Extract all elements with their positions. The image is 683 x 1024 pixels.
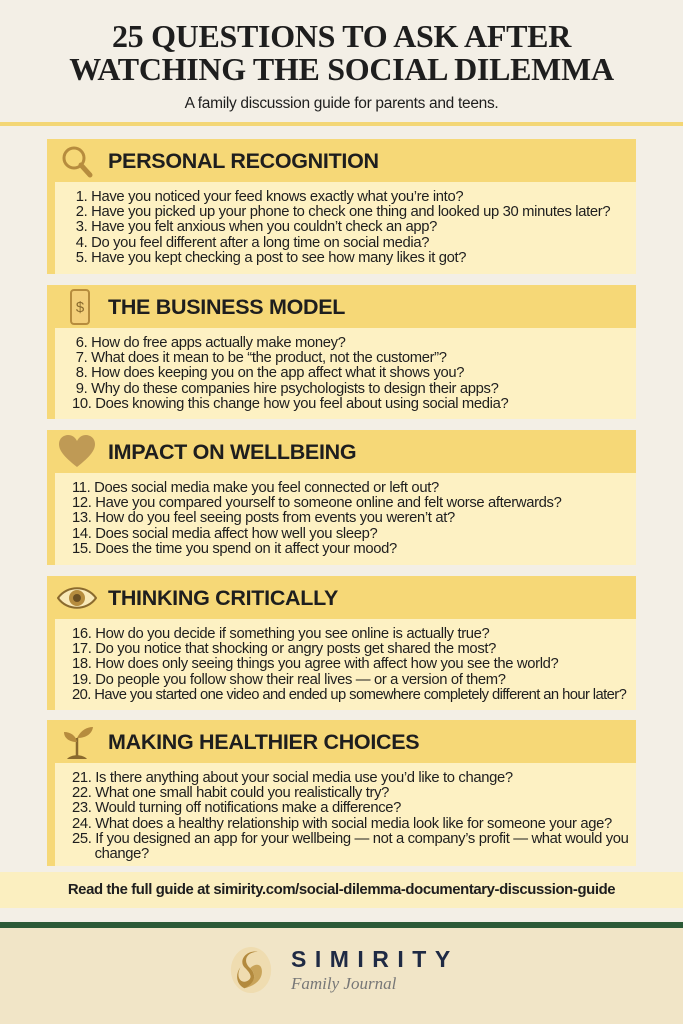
questions 21-25: change? bbox=[95, 846, 149, 862]
questions 11-15: 11. Does social media make you feel connected or left out? bbox=[72, 480, 439, 496]
questions 21-25 bbox=[47, 763, 636, 866]
header: business model: THE BUSINESS MODEL bbox=[108, 295, 345, 319]
questions 11-15: 12. Have you compared yourself to someone online and felt worse afterwards? bbox=[72, 495, 561, 511]
brand name: SIMIRITY bbox=[291, 946, 459, 972]
header: healthier choices bbox=[47, 720, 636, 763]
panel: wellbeing bbox=[47, 430, 636, 565]
header: thinking critically: THINKING CRITICALLY bbox=[108, 586, 338, 610]
header: personal recognition bbox=[47, 139, 636, 182]
questions 6-10: 8. How does keeping you on the app affect what it shows you? bbox=[76, 365, 464, 381]
questions 21-25: 22. What one small habit could you realistically try? bbox=[72, 785, 389, 801]
questions 6-10: 10. Does knowing this change how you feel about using social media? bbox=[72, 396, 508, 412]
questions 11-15 bbox=[47, 473, 636, 565]
questions 6-10 bbox=[47, 328, 636, 419]
panel: thinking critically bbox=[47, 576, 636, 710]
questions 6-10: 9. Why do these companies hire psychologists to design their apps? bbox=[76, 381, 498, 397]
questions 11-15: 13. How do you feel seeing posts from events you weren’t at? bbox=[72, 510, 455, 526]
questions 16-20: 16. How do you decide if something you see online is actually true? bbox=[72, 626, 489, 642]
title: WATCHING THE SOCIAL DILEMMA bbox=[69, 51, 614, 87]
questions 6-10: 6. How do free apps actually make money? bbox=[76, 335, 346, 351]
questions 6-10: 7. What does it mean to be “the product, not the customer”? bbox=[76, 350, 447, 366]
questions 1-5: 2. Have you picked up your phone to check one thing and looked up 30 minutes later? bbox=[76, 204, 610, 220]
tagline: Family Journal bbox=[291, 974, 396, 993]
title bbox=[69, 18, 614, 87]
questions 1-5: 3. Have you felt anxious when you couldn’t check an app? bbox=[76, 219, 437, 235]
questions 16-20: 18. How does only seeing things you agree with affect how you see the world? bbox=[72, 656, 558, 672]
header: wellbeing: IMPACT ON WELLBEING bbox=[108, 440, 356, 464]
questions 21-25: 21. Is there anything about your social media use you’d like to change? bbox=[72, 770, 513, 786]
questions 16-20: 19. Do people you follow show their real lives — or a version of them? bbox=[72, 672, 506, 688]
panel: business model bbox=[47, 285, 636, 419]
questions 16-20: 20. Have you started one video and ended up somewhere completely different an hour later? bbox=[72, 687, 626, 703]
panel: healthier choices bbox=[47, 720, 636, 866]
questions 21-25: 25. If you designed an app for your wellbeing — not a company’s profit — what would you bbox=[72, 831, 629, 847]
icon: logo mark bbox=[231, 947, 271, 993]
questions 16-20 bbox=[47, 619, 636, 710]
questions 21-25: 24. What does a healthy relationship with social media look like for someone your age? bbox=[72, 816, 612, 832]
questions 1-5: 1. Have you noticed your feed knows exactly what you’re into? bbox=[76, 189, 463, 205]
logo bbox=[231, 946, 459, 993]
questions 1-5: 4. Do you feel different after a long time on social media? bbox=[76, 235, 429, 251]
questions 1-5 bbox=[47, 182, 636, 274]
questions 11-15: 14. Does social media affect how well you sleep? bbox=[72, 526, 377, 542]
header: business model: $ bbox=[76, 299, 85, 316]
questions 1-5: 5. Have you kept checking a post to see how many likes it got? bbox=[76, 250, 466, 266]
panel: personal recognition bbox=[47, 139, 636, 274]
subtitle: A family discussion guide for parents and teens. bbox=[185, 95, 498, 112]
header: wellbeing bbox=[47, 430, 636, 473]
header: healthier choices: MAKING HEALTHIER CHOICES bbox=[108, 730, 419, 754]
header: personal recognition: PERSONAL RECOGNITION bbox=[108, 149, 379, 173]
header: business model bbox=[47, 285, 636, 328]
footer link: Read the full guide at simirity.com/social-dilemma-documentary-discussion-guide bbox=[68, 882, 615, 898]
questions 21-25: 23. Would turning off notifications make a difference? bbox=[72, 800, 401, 816]
questions 16-20: 17. Do you notice that shocking or angry posts get shared the most? bbox=[72, 641, 496, 657]
footer link bbox=[0, 872, 683, 908]
header: thinking critically bbox=[47, 576, 636, 619]
questions 11-15: 15. Does the time you spend on it affect your mood? bbox=[72, 541, 397, 557]
title: 25 QUESTIONS TO ASK AFTER bbox=[112, 18, 571, 54]
